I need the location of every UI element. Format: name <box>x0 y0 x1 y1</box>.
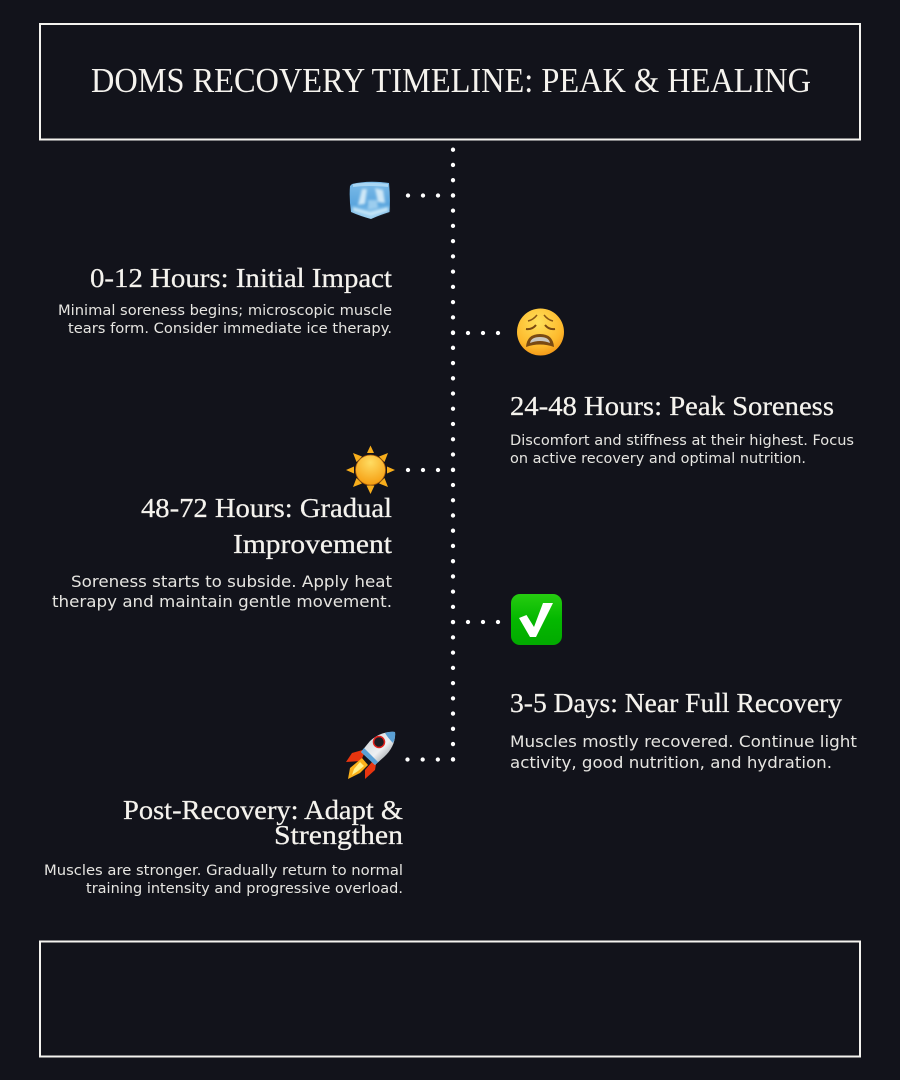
description: 3-5 days <box>510 732 857 772</box>
icon: ice cube <box>350 182 390 219</box>
connector: check to spine <box>453 620 498 624</box>
heading: post-recovery: Post-Recovery: Adapt & <box>123 795 403 825</box>
description: 3-5 days: activity, good nutrition, and hydration. <box>510 753 832 772</box>
description: post-recovery: training intensity and progressive overload. <box>86 881 403 897</box>
description: 0-12 hours: tears form. Consider immediate ice therapy. <box>68 321 392 337</box>
heading: 24-48 hours: 24-48 Hours: Peak Soreness <box>510 391 834 421</box>
heading: post-recovery: Strengthen <box>274 820 404 850</box>
description: 48-72 hours <box>52 572 392 611</box>
step 2 text <box>510 391 854 467</box>
connector: sun to spine <box>408 468 454 472</box>
description: 0-12 hours: Minimal soreness begins; microscopic muscle <box>58 303 392 319</box>
description: 0-12 hours <box>58 303 392 337</box>
icon: check mark <box>511 594 562 645</box>
description: post-recovery <box>44 863 403 897</box>
step 5 text <box>44 795 404 897</box>
description: 24-48 hours <box>510 433 854 467</box>
dotted timeline spine <box>451 150 455 760</box>
icon: rocket <box>346 732 395 779</box>
description: 3-5 days: Muscles mostly recovered. Continue light <box>510 732 857 751</box>
heading: 48-72 hours <box>141 493 393 559</box>
heading: post-recovery <box>123 795 404 850</box>
heading: 48-72 hours: 48-72 Hours: Gradual <box>141 493 392 523</box>
step 3 text <box>52 493 393 611</box>
title: DOMS RECOVERY TIMELINE: PEAK & HEALING <box>91 61 811 100</box>
icon: weary face <box>517 308 564 356</box>
heading: 48-72 hours: Improvement <box>233 529 393 559</box>
title box <box>40 24 860 140</box>
step 4 text <box>510 688 857 772</box>
connector: ice to spine <box>408 193 454 198</box>
connector: rocket to spine <box>408 757 454 762</box>
description: 48-72 hours: therapy and maintain gentle movement. <box>52 592 392 611</box>
description: 24-48 hours: Discomfort and stiffness at their highest. Focus <box>510 433 854 449</box>
description: 48-72 hours: Soreness starts to subside. Apply heat <box>71 572 392 591</box>
heading: 3-5 days: 3-5 Days: Near Full Recovery <box>510 688 842 718</box>
step 1 text <box>58 263 393 337</box>
heading: 0-12 hours: 0-12 Hours: Initial Impact <box>90 263 393 293</box>
icon: sun <box>346 446 395 494</box>
empty footer box <box>40 942 860 1056</box>
connector: face to spine <box>453 331 498 335</box>
description: post-recovery: Muscles are stronger. Gradually return to normal <box>44 863 403 879</box>
description: 24-48 hours: on active recovery and optimal nutrition. <box>510 451 806 467</box>
